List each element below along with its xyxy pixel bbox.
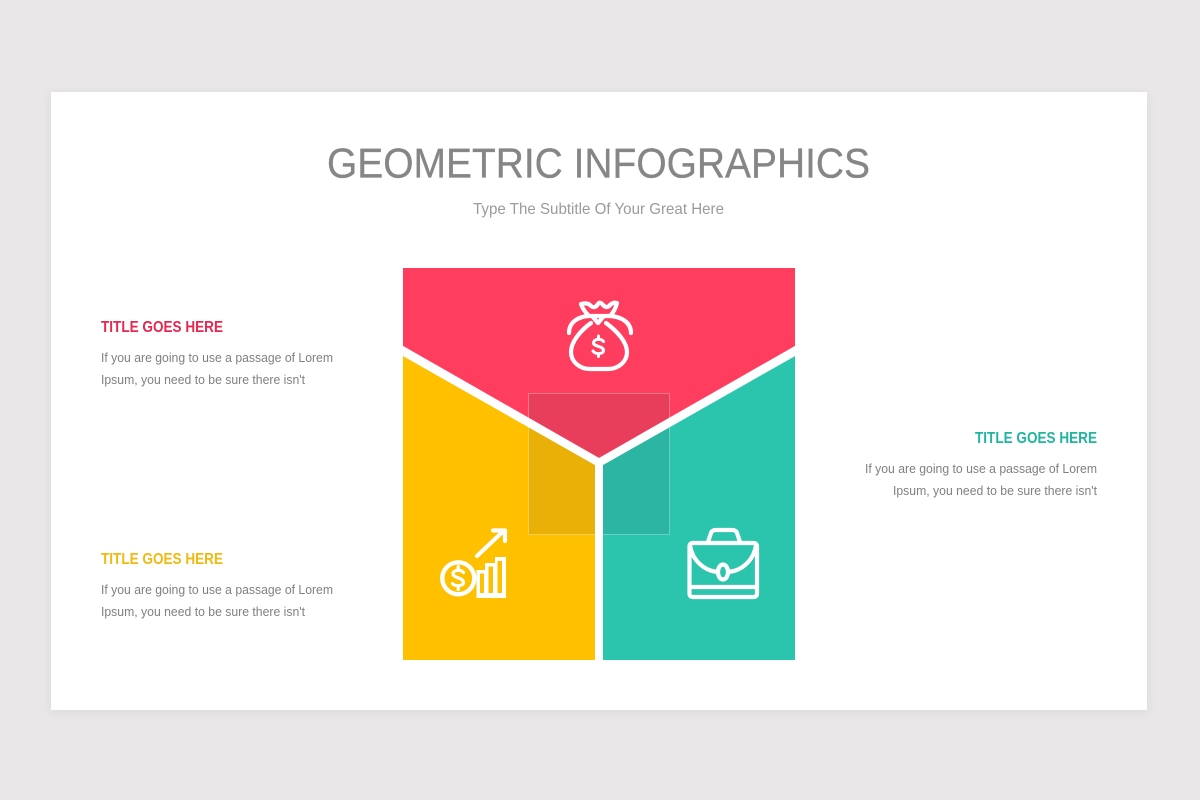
heading: red: TITLE GOES HERE xyxy=(101,319,223,336)
translucent centre square xyxy=(528,394,670,534)
right text block: teal xyxy=(865,430,1098,498)
panel: teal right xyxy=(603,356,795,660)
panel: yellow left xyxy=(403,356,595,660)
geometric square diagram xyxy=(403,268,795,660)
title: GEOMETRIC INFOGRAPHICS xyxy=(327,140,870,186)
left text block: red xyxy=(101,319,333,387)
body: yellow: If you are going to use a passage of Lorem xyxy=(101,583,333,597)
heading: yellow: TITLE GOES HERE xyxy=(101,551,223,568)
body: yellow: Ipsum, you need to be sure there isn't xyxy=(101,605,306,619)
body: teal: If you are going to use a passage of Lorem xyxy=(865,462,1097,476)
background card xyxy=(51,92,1147,710)
bars xyxy=(476,557,506,598)
icon: money bag xyxy=(569,303,631,369)
body: red: Ipsum, you need to be sure there isn't xyxy=(101,373,306,387)
body: red: If you are going to use a passage of Lorem xyxy=(101,351,333,365)
icon: coin and rising bars xyxy=(442,530,506,598)
body: teal: Ipsum, you need to be sure there isn't xyxy=(893,484,1098,498)
panel: red top xyxy=(403,268,795,458)
coin xyxy=(442,562,474,594)
heading: teal: TITLE GOES HERE xyxy=(975,430,1097,447)
white dividers xyxy=(403,346,795,660)
icon: briefcase xyxy=(690,530,757,597)
subtitle: Type The Subtitle Of Your Great Here xyxy=(473,201,724,218)
arrow xyxy=(477,530,505,556)
left text block: yellow xyxy=(101,551,333,619)
